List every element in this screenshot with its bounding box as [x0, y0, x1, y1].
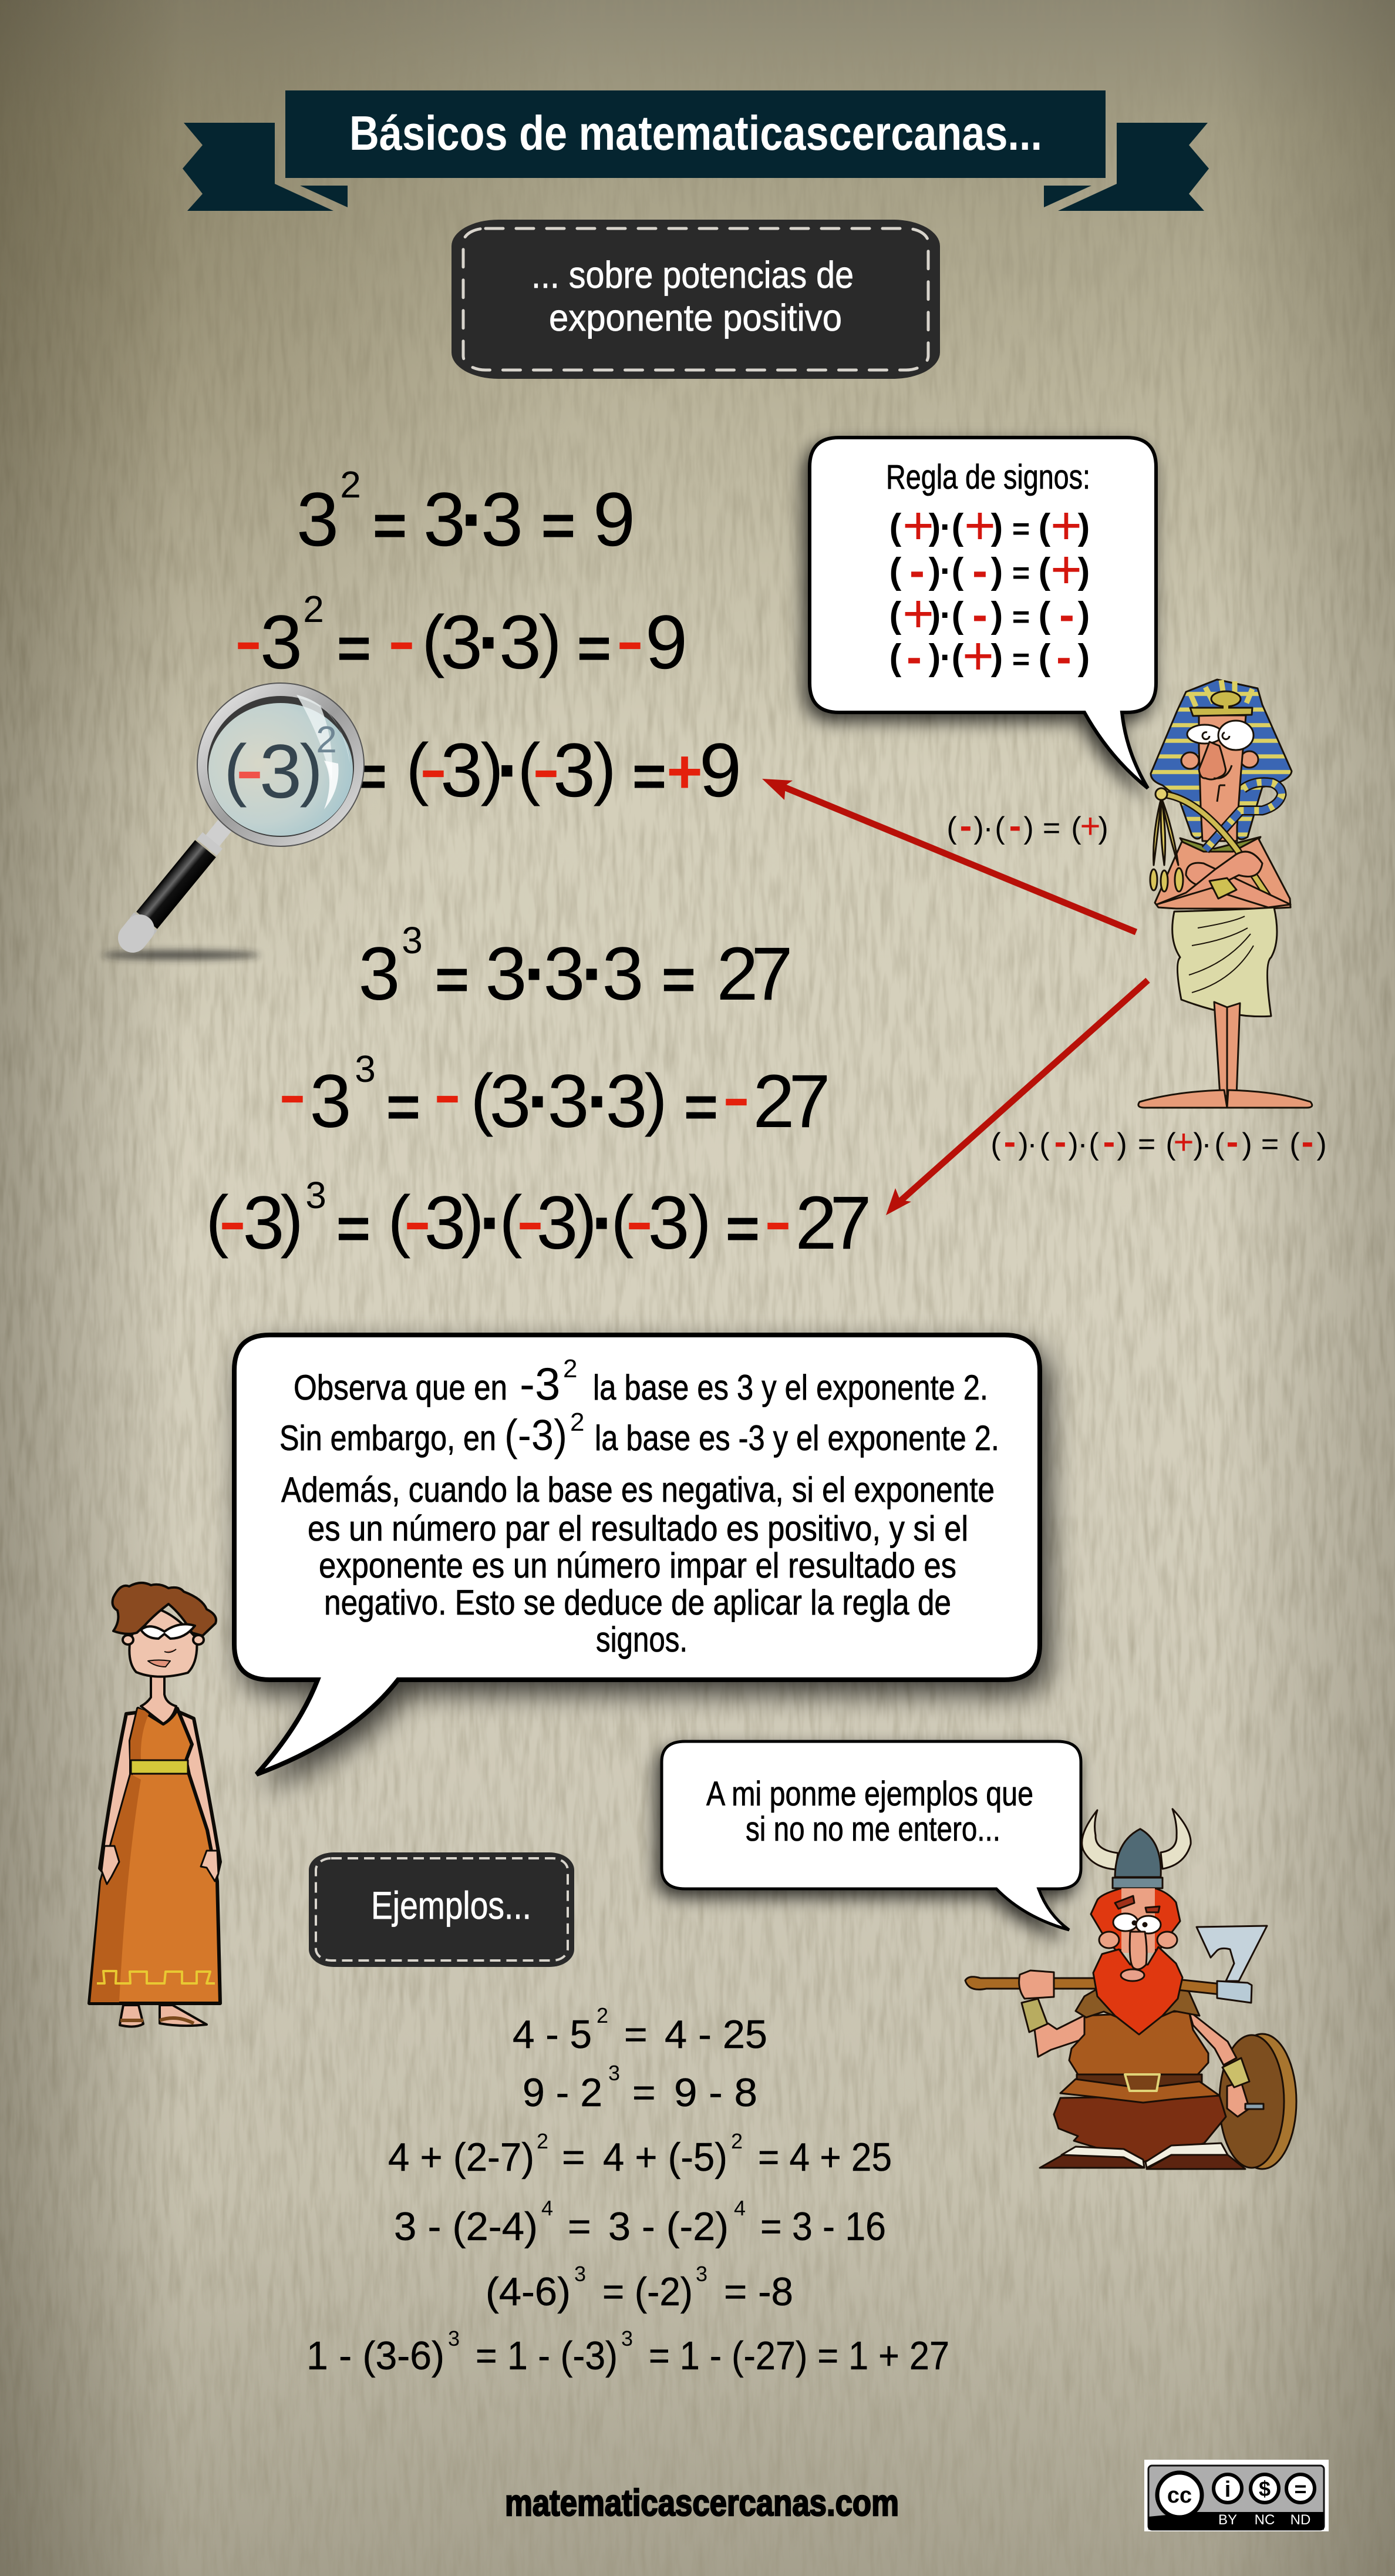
equation: negative 3 in parentheses squared, right side: 3: [553, 727, 595, 813]
sign rule row 3: (: [1039, 595, 1051, 635]
bubble heading: Regla de signos:: [886, 458, 1090, 496]
equation: 3 squared: 3: [296, 476, 339, 562]
equation: minus 3 squared: -: [388, 591, 416, 687]
equation: 3 cubed: 2: [716, 932, 759, 1016]
equation: minus 3 squared: (: [422, 601, 445, 679]
example 4: 3 - (2-4): [394, 2204, 538, 2249]
explanation line 1: [294, 1354, 988, 1410]
note: product of two negatives: (: [995, 811, 1005, 845]
sign rule row 3: -: [972, 588, 988, 640]
explanation line 1: -3: [520, 1358, 560, 1410]
creative commons badge: =: [1294, 2477, 1307, 2501]
explanation line 1: Observa que en: [294, 1368, 507, 1407]
note: product of two negatives: ): [973, 811, 984, 845]
equation: 3 squared: =: [541, 493, 575, 559]
equation: negative 3 in parentheses cubed: ·: [479, 1181, 504, 1265]
equation: 3 squared: =: [373, 493, 407, 559]
chalkboard label: subtitle: [451, 220, 940, 379]
note: product of two negatives: -: [960, 806, 972, 846]
equation: 3 cubed: =: [435, 947, 469, 1013]
equation: 3 cubed: ·: [524, 932, 548, 1016]
note: product of three negatives: ·: [1077, 1127, 1088, 1161]
equation: minus 3 squared: 2: [303, 588, 324, 630]
equation: minus 3 squared: 3: [499, 599, 541, 685]
speech bubble: viking: [662, 1741, 1081, 1930]
equation: negative 3 in parentheses cubed: ): [461, 1182, 484, 1259]
sign rule row 1: +: [1050, 496, 1082, 556]
note: product of three negatives: (: [990, 1127, 1001, 1161]
equation: minus 3 cubed: -: [722, 1048, 750, 1143]
equation: minus 3 cubed: -: [278, 1045, 306, 1140]
speech bubble: explanation: [234, 1335, 1040, 1774]
equation: negative 3 in parentheses cubed: ·: [591, 1181, 616, 1265]
note: product of three negatives: -: [1004, 1122, 1016, 1162]
sign rule row 4: =: [1012, 643, 1030, 677]
sign rule row 3: +: [902, 584, 934, 644]
sign rule row 1: +: [964, 496, 996, 556]
equation: minus 3 cubed: ·: [587, 1060, 611, 1144]
creative commons badge: BY: [1218, 2512, 1237, 2528]
creative commons badge: cc: [1167, 2483, 1192, 2508]
note: product of three negatives: -: [1226, 1122, 1238, 1162]
example 6: = 1 - (-3): [476, 2333, 618, 2378]
equation: negative 3 in parentheses cubed: ): [574, 1182, 597, 1259]
example 4: 3 - (-2): [608, 2204, 729, 2249]
example 5: = (-2): [602, 2269, 693, 2314]
example 2: =: [632, 2070, 656, 2115]
explanation paragraph: negativo. Esto se deduce de aplicar la regla de: [324, 1583, 951, 1622]
note: product of two negatives: (: [946, 811, 957, 845]
sign rule row 3: ): [929, 595, 941, 635]
equation: negative 3 in parentheses cubed: -: [625, 1172, 653, 1267]
explanation line 1: 2: [563, 1354, 577, 1383]
equation: minus 3 cubed: 2: [753, 1060, 795, 1144]
note: product of three negatives: (: [1214, 1127, 1225, 1161]
subtitle text: exponente positivo: [549, 297, 842, 339]
sign rule row 4: +: [962, 626, 994, 686]
bubble text: A mi ponme ejemplos que: [706, 1775, 1033, 1813]
sign rule row 2: +: [1050, 540, 1082, 600]
note: product of three negatives: (: [1165, 1127, 1176, 1161]
equation: negative 3 in parentheses squared, right side: =: [353, 744, 387, 809]
icon: magnifying glass over (-3)^2: [102, 683, 364, 960]
equation: 3 cubed: =: [662, 947, 696, 1013]
equation: negative 3 in parentheses squared, right side: 9: [699, 727, 742, 813]
note: product of three negatives: (: [1289, 1127, 1300, 1161]
title ribbon banner: [183, 90, 1209, 211]
sign rule row 2: (: [1039, 551, 1051, 591]
example 6: = 1 - (-27) = 1 + 27: [649, 2333, 949, 2378]
equation: minus 3 squared: 3: [260, 599, 302, 685]
equation: minus 3 squared: -: [616, 591, 644, 687]
example 3: 4 + (2-7): [388, 2135, 534, 2180]
equation: negative 3 in parentheses cubed: (: [611, 1182, 634, 1259]
equation: 3 cubed: 7: [751, 932, 793, 1016]
note: product of three negatives: ): [1193, 1127, 1204, 1161]
example 6: [306, 2326, 949, 2378]
sign rule row 3: ): [1078, 595, 1090, 635]
note: product of three negatives: ): [1018, 1127, 1029, 1161]
equation: negative 3 in parentheses squared, right side: +: [666, 738, 703, 806]
equation: negative 3 in parentheses cubed: 3: [242, 1181, 285, 1265]
sign rule row 1: (: [889, 507, 902, 547]
equation: negative 3 in parentheses squared, right side: 3: [440, 727, 483, 813]
example 1: 2: [597, 2003, 608, 2027]
equation: minus 3 cubed: ): [644, 1060, 668, 1138]
sign rule row 4: (: [1039, 637, 1051, 678]
equation: minus 3 squared: 3: [440, 599, 483, 685]
sign rule row 4: -: [1056, 631, 1071, 682]
equation: negative 3 in parentheses cubed: ): [688, 1182, 712, 1259]
example 5: 3: [696, 2262, 707, 2286]
note: product of two negatives: +: [1080, 806, 1101, 846]
example 1: 4 - 5: [513, 2012, 592, 2057]
equation: negative 3 in parentheses cubed: (: [499, 1182, 523, 1259]
lens text: (-3)^2: -: [235, 721, 264, 816]
example 1: [513, 2003, 767, 2057]
example 3: =: [562, 2135, 585, 2180]
example 4: 4: [541, 2196, 553, 2220]
sign rule row 3: =: [1012, 600, 1030, 634]
note: product of three negatives: -: [1103, 1122, 1115, 1162]
sign rule row 2: (: [952, 551, 964, 591]
example 4: [394, 2196, 886, 2249]
sign rule row 1: (: [952, 507, 964, 547]
equation: negative 3 in parentheses cubed: =: [726, 1196, 760, 1262]
equation: minus 3 squared: -: [234, 591, 262, 687]
sign rule row 4: ·: [940, 637, 952, 678]
explanation line 2: Sin embargo, en: [279, 1418, 496, 1458]
equation: minus 3 cubed: 3: [355, 1048, 376, 1090]
character: viking: [965, 1809, 1296, 2169]
note: product of two negatives: ·: [983, 811, 993, 845]
creative commons badge: ND: [1290, 2512, 1310, 2528]
note: product of three negatives: (: [1089, 1127, 1099, 1161]
sign rule row 2: -: [972, 544, 988, 596]
sign rule row 2: ): [1078, 551, 1090, 591]
lens text: (-3)^2: 2: [316, 718, 337, 761]
sign rule row 2: ): [991, 551, 1003, 591]
equation: negative 3 in parentheses cubed: 2: [795, 1181, 837, 1265]
sign rule row 2: =: [1012, 556, 1030, 590]
example 6: 3: [448, 2326, 460, 2350]
creative commons badge: NC: [1255, 2512, 1275, 2528]
sign rule row 4: (: [952, 637, 964, 678]
equation: minus 3 cubed: (: [470, 1060, 494, 1138]
equation: minus 3 squared: =: [337, 616, 371, 681]
speech bubble: regla de signos: [810, 438, 1156, 788]
sign rule row 3: ): [991, 595, 1003, 635]
equation: minus 3 cubed: 3: [309, 1060, 352, 1144]
creative commons badge: [1144, 2460, 1329, 2531]
character: pharaoh: [1138, 680, 1312, 1108]
equation: 3 squared: 9: [593, 476, 635, 562]
equation: minus 3 cubed: 3: [605, 1060, 648, 1144]
equation: negative 3 in parentheses cubed: -: [403, 1172, 432, 1267]
sign rule row 2: ): [929, 551, 941, 591]
creative commons badge: $: [1259, 2477, 1271, 2501]
example 5: [486, 2262, 793, 2314]
explanation line 2: (-3): [504, 1411, 567, 1459]
note: product of two negatives: ): [1023, 811, 1034, 845]
sign rule row 1: ): [991, 507, 1003, 547]
equation: 3 squared: 3: [481, 476, 523, 562]
chalkboard label: ejemplos: [309, 1852, 574, 1967]
equation: negative 3 in parentheses cubed: ): [280, 1182, 304, 1259]
note: product of three negatives: ): [1068, 1127, 1079, 1161]
note: product of two negatives: (: [1071, 811, 1081, 845]
equation: negative 3 in parentheses squared, right side: ): [480, 729, 504, 807]
explanation paragraph: es un número par el resultado es positivo, y si el: [308, 1509, 968, 1548]
equation: negative 3 in parentheses cubed: =: [336, 1196, 370, 1262]
equation: negative 3 in parentheses squared, right side: =: [632, 744, 666, 809]
explanation paragraph: signos.: [596, 1620, 688, 1659]
note: product of three negatives: =: [1138, 1127, 1155, 1161]
note: product of three negatives: ·: [1027, 1127, 1037, 1161]
equation: minus 3 cubed: =: [386, 1074, 420, 1140]
sign rule row 3: ·: [940, 595, 952, 635]
sign rule row 1: +: [902, 496, 934, 556]
equation: negative 3 in parentheses squared, right side: (: [406, 729, 429, 807]
equation: negative 3 in parentheses cubed: (: [388, 1182, 411, 1259]
equation: minus 3 squared: =: [577, 616, 611, 681]
sign rule row 4: (: [889, 637, 902, 678]
equation: minus 3 cubed: -: [433, 1045, 461, 1140]
equation: negative 3 in parentheses cubed: 3: [648, 1181, 690, 1265]
example 2: 9 - 2: [523, 2070, 602, 2115]
sign rule row 4: ): [991, 637, 1003, 678]
equation: negative 3 in parentheses cubed: -: [516, 1172, 544, 1267]
explanation line 2: la base es -3 y el exponente 2.: [595, 1418, 999, 1458]
explanation line 2: [279, 1408, 999, 1459]
equation: negative 3 in parentheses cubed: -: [764, 1172, 792, 1267]
equation: 3 cubed: ·: [581, 932, 606, 1016]
equation: minus 3 squared: ): [538, 601, 562, 679]
sign rule row 4: ): [929, 637, 941, 678]
website footer: matematicascercanas.com: [505, 2483, 899, 2524]
example 3: 4 + (-5): [603, 2135, 727, 2180]
equation: 3 cubed: 3: [485, 932, 527, 1016]
example 4: = 3 - 16: [760, 2204, 886, 2249]
example 4: =: [568, 2204, 591, 2249]
creative commons badge: i: [1225, 2477, 1231, 2502]
equation: 3 cubed: 3: [543, 932, 585, 1016]
equation: 3 cubed: 3: [402, 919, 423, 961]
example 5: 3: [574, 2262, 586, 2286]
lens text: (-3)^2: 3: [260, 728, 302, 814]
sign rule row 2: ·: [940, 551, 952, 591]
sign rule row 1: ·: [940, 507, 952, 547]
equation: minus 3 cubed: 3: [547, 1060, 589, 1144]
explanation line 1: la base es 3 y el exponente 2.: [593, 1368, 988, 1407]
note: product of three negatives: ): [1117, 1127, 1127, 1161]
sign rule row 1: ): [1078, 507, 1090, 547]
equation: minus 3 cubed: =: [684, 1074, 718, 1140]
example 6: 3: [621, 2326, 633, 2350]
equation: negative 3 in parentheses squared, right side: -: [532, 719, 560, 815]
example 5: (4-6): [486, 2269, 571, 2314]
example 3: 2: [731, 2129, 743, 2153]
equation: negative 3 in parentheses cubed: 3: [424, 1181, 466, 1265]
note: product of three negatives: ·: [1201, 1127, 1212, 1161]
equation: negative 3 in parentheses cubed: 3: [536, 1181, 578, 1265]
note: product of three negatives: ): [1242, 1127, 1252, 1161]
explanation line 2: 2: [570, 1408, 584, 1437]
sign rule row 2: -: [909, 544, 925, 596]
title text: Básicos de matematicascercanas...: [349, 106, 1042, 160]
equation: negative 3 in parentheses squared, right side: (: [517, 729, 541, 807]
equation: negative 3 in parentheses squared, right side: -: [419, 719, 447, 815]
lens text: (-3)^2: (: [224, 731, 247, 808]
example 3: [388, 2129, 892, 2180]
note: product of three negatives: ): [1316, 1127, 1327, 1161]
example 2: [523, 2061, 757, 2115]
sign rule row 1: =: [1012, 512, 1030, 546]
arrow: pharaoh to -27: [886, 980, 1148, 1215]
subtitle text: ... sobre potencias de: [531, 254, 854, 296]
equation: 3 squared: 2: [340, 463, 361, 506]
example 1: =: [624, 2012, 648, 2057]
example 6: 1 - (3-6): [306, 2333, 444, 2378]
equation: 3 squared: 3: [423, 476, 466, 562]
sign rule row 2: (: [889, 551, 902, 591]
note: product of two negatives: =: [1043, 811, 1060, 845]
equation: minus 3 cubed: 7: [789, 1060, 831, 1144]
note: product of three negatives: (: [1039, 1127, 1050, 1161]
sign rule row 1: ): [929, 507, 941, 547]
equation: negative 3 in parentheses cubed: 3: [305, 1174, 326, 1216]
lens text: (-3)^2: ): [299, 731, 323, 808]
note: product of two negatives: -: [1009, 806, 1021, 846]
example 5: = -8: [724, 2269, 793, 2314]
explanation paragraph: Además, cuando la base es negativa, si el exponente: [281, 1470, 995, 1509]
sign rule row 3: (: [952, 595, 964, 635]
note: product of three negatives: -: [1054, 1122, 1066, 1162]
equation: negative 3 in parentheses squared, right side: ·: [496, 727, 522, 813]
label text: Ejemplos...: [371, 1884, 531, 1927]
note: product of two negatives: ): [1098, 811, 1108, 845]
sign rule row 3: -: [1059, 588, 1074, 640]
equation: minus 3 squared: ·: [477, 599, 503, 685]
explanation paragraph: exponente es un número impar el resultado es: [319, 1546, 956, 1585]
example 2: 9 - 8: [674, 2070, 757, 2115]
character: woman in orange dress: [89, 1583, 220, 2027]
example 2: 3: [608, 2061, 620, 2085]
arrow: pharaoh to +9: [762, 779, 1136, 932]
sign rule row 4: ): [1078, 637, 1090, 678]
equation: 3 cubed: 3: [602, 932, 644, 1016]
equation: 3 cubed: 3: [358, 932, 400, 1016]
example 4: 4: [734, 2196, 746, 2220]
equation: negative 3 in parentheses squared, right side: ): [593, 729, 616, 807]
equation: minus 3 squared: 9: [645, 599, 688, 685]
note: product of three negatives: =: [1261, 1127, 1279, 1161]
equation: minus 3 cubed: ·: [527, 1060, 552, 1144]
equation: minus 3 cubed: 3: [489, 1060, 531, 1144]
note: product of three negatives: +: [1173, 1122, 1194, 1162]
equation: 3 squared: ·: [460, 476, 486, 562]
example 3: = 4 + 25: [758, 2135, 892, 2180]
sign rule row 3: (: [889, 595, 902, 635]
example 1: 4 - 25: [665, 2012, 767, 2057]
sign rule row 4: -: [907, 631, 922, 682]
example 3: 2: [537, 2129, 548, 2153]
equation: negative 3 in parentheses cubed: -: [218, 1172, 247, 1267]
equation: negative 3 in parentheses cubed: (: [205, 1182, 229, 1259]
equation: negative 3 in parentheses cubed: 7: [830, 1181, 872, 1265]
sign rule row 1: (: [1039, 507, 1051, 547]
note: product of three negatives: -: [1302, 1122, 1313, 1162]
bubble text: si no no me entero...: [746, 1810, 1000, 1848]
